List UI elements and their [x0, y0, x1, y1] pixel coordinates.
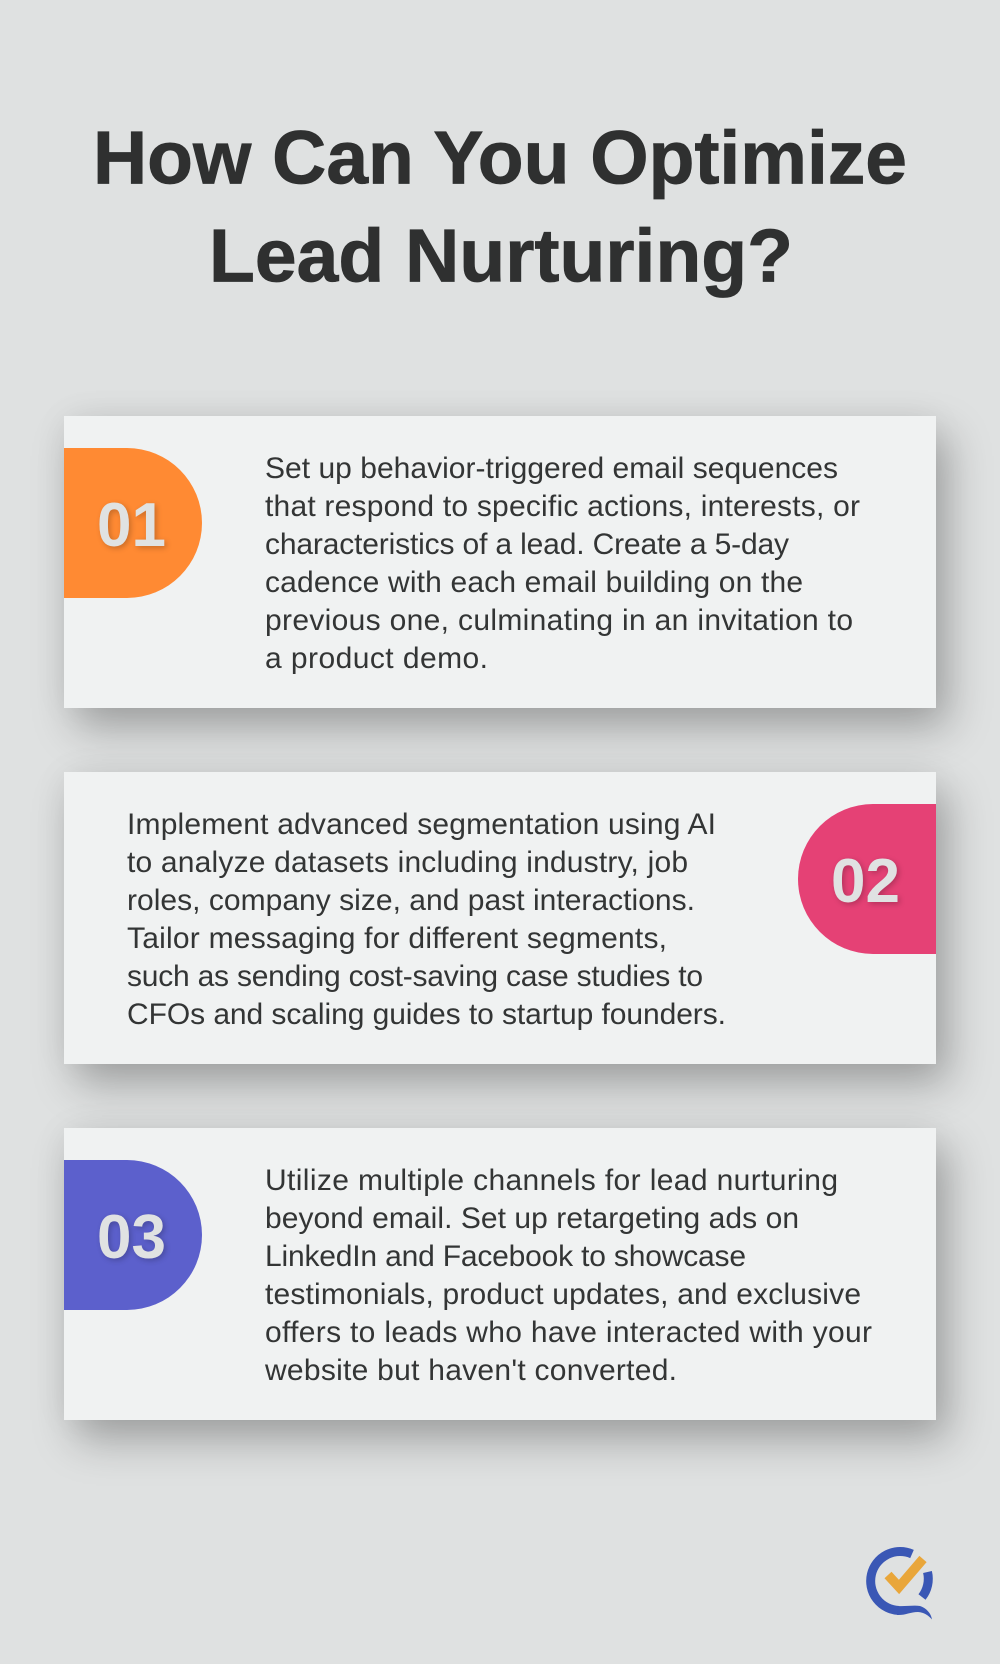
text block: step 02: roles, company size, and past interactions. [127, 884, 695, 917]
panel: step 03 [64, 1128, 936, 1420]
panel: step 01 [64, 416, 936, 708]
text block: step 02: CFOs and scaling guides to startup founders. [127, 998, 726, 1031]
text block: step 03: testimonials, product updates, and exclusive [265, 1278, 861, 1311]
text block: step 01: a product demo. [265, 642, 488, 675]
text block: step 01: that respond to specific actions, interests, or [265, 490, 860, 523]
badge: 02 [798, 804, 936, 954]
badge: 03 [64, 1160, 202, 1310]
text block: step 01: cadence with each email building on the [265, 566, 803, 599]
text block: step 03: LinkedIn and Facebook to showcase [265, 1240, 746, 1273]
title [93, 116, 907, 298]
text block: step 02: Tailor messaging for different segments, [127, 922, 667, 955]
title: Lead Nurturing? [209, 214, 793, 298]
text block: step 02: to analyze datasets including industry, job [127, 846, 688, 879]
text block: step 03: offers to leads who have interacted with your [265, 1316, 872, 1349]
panel: step 02 [64, 772, 936, 1064]
text block: step 02: such as sending cost-saving case studies to [127, 960, 703, 993]
icon: logo [866, 1547, 933, 1620]
title: How Can You Optimize [93, 116, 907, 200]
badge: 02: 02 [831, 847, 900, 916]
badge: 01: 01 [97, 491, 166, 560]
text block: step 02 [127, 808, 726, 1031]
text block: step 03: beyond email. Set up retargeting ads on [265, 1202, 799, 1235]
text block: step 01: Set up behavior-triggered email sequences [265, 452, 838, 485]
text block: step 03: website but haven't converted. [264, 1354, 677, 1387]
text block: step 03: Utilize multiple channels for lead nurturing [265, 1164, 838, 1197]
badge: 03: 03 [97, 1203, 166, 1272]
badge: 01 [64, 448, 202, 598]
text block: step 01: characteristics of a lead. Create a 5-day [265, 528, 789, 561]
text block: step 02: Implement advanced segmentation using AI [127, 808, 716, 841]
text block: step 03 [264, 1164, 872, 1387]
text block: step 01 [265, 452, 860, 675]
text block: step 01: previous one, culminating in an invitation to [265, 604, 853, 637]
